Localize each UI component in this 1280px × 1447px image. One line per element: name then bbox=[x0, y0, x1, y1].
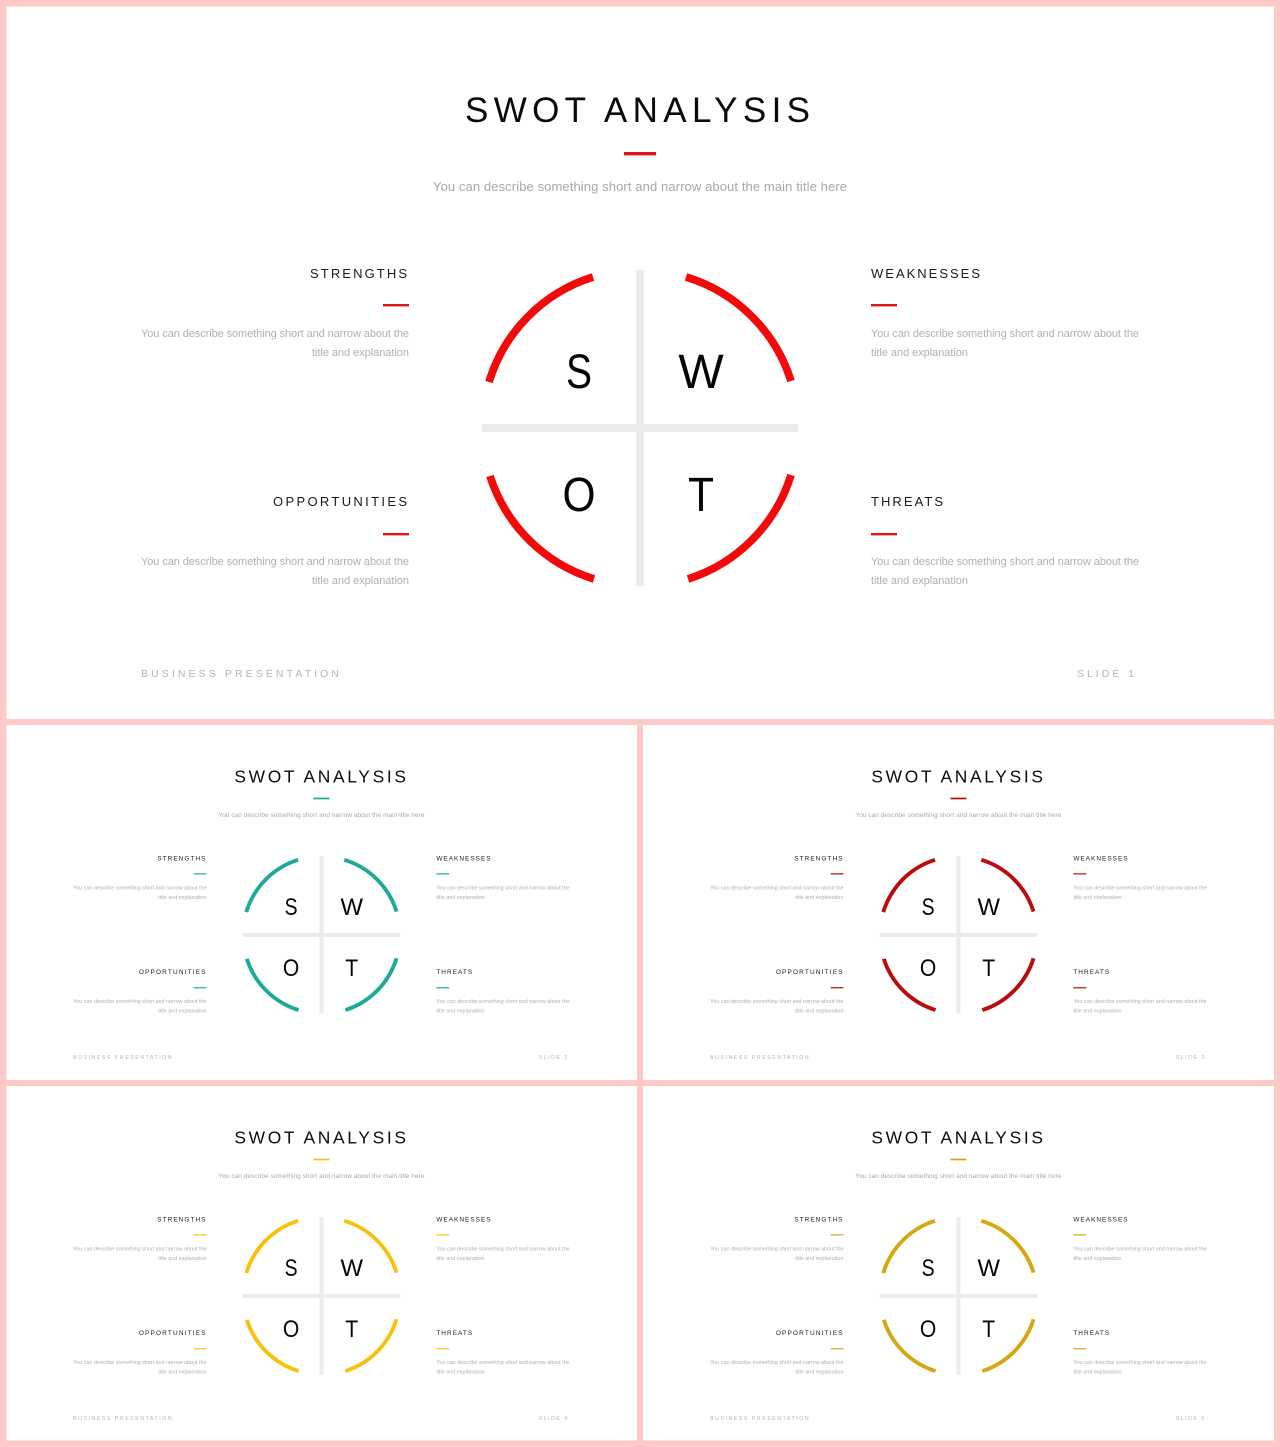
text block: threats: THREATS bbox=[1073, 1330, 1110, 1337]
text block: threats bbox=[871, 494, 1139, 587]
subtitle: You can describe something short and narrow about the main title here bbox=[218, 1173, 425, 1180]
footer right: SLIDE 2 bbox=[539, 1055, 567, 1061]
text block: opportunities: OPPORTUNITIES bbox=[776, 1330, 843, 1337]
text block: strengths bbox=[710, 855, 843, 901]
text block: weaknesses: title and explanation bbox=[436, 1256, 485, 1262]
text block: strengths: You can describe something short and narrow about the bbox=[73, 1247, 206, 1253]
title: SWOT ANALYSIS bbox=[465, 91, 810, 130]
text block: threats: You can describe something short and narrow about the bbox=[436, 999, 570, 1005]
footer left: BUSINESS PRESENTATION bbox=[710, 1416, 809, 1422]
text block: opportunities: You can describe something short and narrow about the bbox=[73, 1360, 206, 1366]
title: SWOT ANALYSIS bbox=[871, 1128, 1043, 1148]
text block: opportunities: You can describe something short and narrow about the bbox=[710, 1360, 843, 1366]
SWOT circle diagram: W bbox=[340, 894, 363, 921]
footer right: SLIDE 1 bbox=[1077, 668, 1134, 680]
text block: strengths: You can describe something short and narrow about the bbox=[141, 328, 409, 340]
SWOT circle diagram: T bbox=[345, 955, 359, 982]
footer right: SLIDE 5 bbox=[1176, 1416, 1204, 1422]
text block: opportunities: title and explanation bbox=[312, 575, 409, 587]
footer right: SLIDE 3 bbox=[1176, 1055, 1204, 1061]
text block: threats: title and explanation bbox=[1073, 1370, 1122, 1376]
SWOT circle diagram bbox=[880, 856, 1037, 1014]
text block: threats: title and explanation bbox=[1073, 1009, 1122, 1015]
text block: weaknesses: WEAKNESSES bbox=[1073, 1216, 1128, 1223]
panel: slide 2 (teal) bbox=[6, 725, 637, 1080]
text block: threats bbox=[436, 1330, 570, 1376]
text block: strengths bbox=[710, 1216, 843, 1262]
SWOT circle diagram: S bbox=[922, 1255, 935, 1282]
footer right: SLIDE 4 bbox=[539, 1416, 567, 1422]
text block: weaknesses: You can describe something short and narrow about the bbox=[1073, 886, 1207, 892]
SWOT circle diagram: T bbox=[982, 955, 996, 982]
SWOT circle diagram bbox=[482, 270, 798, 586]
SWOT circle diagram bbox=[880, 1217, 1037, 1375]
SWOT circle diagram: T bbox=[982, 1316, 996, 1343]
SWOT circle diagram: W bbox=[977, 1255, 1000, 1282]
panel: slide 5 (gold) bbox=[643, 1086, 1274, 1440]
text block: opportunities: OPPORTUNITIES bbox=[776, 969, 843, 976]
text block: weaknesses: You can describe something short and narrow about the bbox=[436, 1247, 570, 1253]
text block: opportunities: OPPORTUNITIES bbox=[139, 1330, 206, 1337]
panel: slide 1 (red, large) bbox=[6, 6, 1274, 719]
text block: strengths bbox=[73, 855, 206, 901]
footer left: BUSINESS PRESENTATION bbox=[73, 1055, 172, 1061]
text block: threats bbox=[1073, 969, 1207, 1015]
text block: strengths: You can describe something short and narrow about the bbox=[710, 886, 843, 892]
text block: opportunities: OPPORTUNITIES bbox=[273, 494, 407, 509]
SWOT circle diagram bbox=[243, 856, 400, 1014]
title: SWOT ANALYSIS bbox=[234, 767, 406, 787]
text block: weaknesses: You can describe something short and narrow about the bbox=[1073, 1247, 1207, 1253]
text block: threats: THREATS bbox=[436, 969, 473, 976]
panel: slide 4 (yellow) bbox=[6, 1086, 637, 1440]
text block: strengths: title and explanation bbox=[158, 895, 206, 901]
text block: weaknesses: WEAKNESSES bbox=[436, 1216, 491, 1223]
SWOT circle diagram: W bbox=[678, 346, 724, 399]
text block: opportunities: You can describe something short and narrow about the bbox=[73, 999, 206, 1005]
text block: opportunities: OPPORTUNITIES bbox=[139, 969, 206, 976]
text block: threats: You can describe something short and narrow about the bbox=[871, 556, 1139, 568]
text block: weaknesses bbox=[871, 266, 1139, 359]
text block: threats: THREATS bbox=[1073, 969, 1110, 976]
SWOT circle diagram: O bbox=[283, 955, 299, 982]
title accent line bbox=[950, 1159, 966, 1160]
text block: strengths bbox=[141, 266, 409, 359]
title: SWOT ANALYSIS bbox=[234, 1128, 406, 1148]
text block: weaknesses: title and explanation bbox=[1073, 1256, 1122, 1262]
text block: opportunities: title and explanation bbox=[795, 1370, 843, 1376]
text block: weaknesses: WEAKNESSES bbox=[871, 266, 980, 281]
text block: strengths: STRENGTHS bbox=[157, 855, 206, 862]
footer left: BUSINESS PRESENTATION bbox=[141, 668, 339, 680]
text block: threats: title and explanation bbox=[871, 575, 968, 587]
text block: opportunities bbox=[141, 494, 409, 587]
text block: opportunities bbox=[73, 1330, 206, 1376]
text block: opportunities: title and explanation bbox=[158, 1370, 206, 1376]
text block: weaknesses bbox=[436, 1216, 570, 1262]
text block: strengths: STRENGTHS bbox=[794, 1216, 843, 1223]
text block: threats: title and explanation bbox=[436, 1370, 485, 1376]
text block: strengths: title and explanation bbox=[312, 347, 409, 359]
text block: strengths: STRENGTHS bbox=[794, 855, 843, 862]
subtitle: You can describe something short and narrow about the main title here bbox=[218, 812, 425, 819]
text block: weaknesses: You can describe something short and narrow about the bbox=[436, 886, 570, 892]
text block: weaknesses: WEAKNESSES bbox=[1073, 855, 1128, 862]
text block: strengths: title and explanation bbox=[795, 1256, 843, 1262]
SWOT circle diagram: S bbox=[285, 894, 298, 921]
title accent line bbox=[950, 798, 966, 799]
SWOT circle diagram: W bbox=[977, 894, 1000, 921]
SWOT circle diagram: S bbox=[566, 346, 592, 399]
text block: weaknesses: title and explanation bbox=[871, 347, 968, 359]
text block: weaknesses bbox=[1073, 1216, 1207, 1262]
text block: threats bbox=[1073, 1330, 1207, 1376]
text block: opportunities bbox=[710, 1330, 843, 1376]
SWOT circle diagram: O bbox=[920, 955, 936, 982]
text block: strengths: You can describe something short and narrow about the bbox=[73, 886, 206, 892]
subtitle: You can describe something short and narrow about the main title here bbox=[855, 812, 1062, 819]
footer left: BUSINESS PRESENTATION bbox=[710, 1055, 809, 1061]
text block: weaknesses: title and explanation bbox=[436, 895, 485, 901]
text block: weaknesses bbox=[1073, 855, 1207, 901]
text block: threats: title and explanation bbox=[436, 1009, 485, 1015]
subtitle: You can describe something short and narrow about the main title here bbox=[433, 179, 847, 194]
text block: strengths: STRENGTHS bbox=[310, 266, 407, 281]
text block: opportunities bbox=[73, 969, 206, 1015]
text block: opportunities: You can describe something short and narrow about the bbox=[141, 556, 409, 568]
text block: threats: THREATS bbox=[871, 494, 943, 509]
SWOT circle diagram: S bbox=[285, 1255, 298, 1282]
text block: strengths: You can describe something short and narrow about the bbox=[710, 1247, 843, 1253]
SWOT circle diagram: T bbox=[345, 1316, 359, 1343]
text block: weaknesses: title and explanation bbox=[1073, 895, 1122, 901]
SWOT circle diagram: S bbox=[922, 894, 935, 921]
text block: weaknesses: You can describe something short and narrow about the bbox=[871, 328, 1139, 340]
subtitle: You can describe something short and narrow about the main title here bbox=[855, 1173, 1062, 1180]
text block: weaknesses bbox=[436, 855, 570, 901]
text block: threats: You can describe something short and narrow about the bbox=[1073, 1360, 1207, 1366]
text block: threats bbox=[436, 969, 570, 1015]
SWOT circle diagram bbox=[243, 1217, 400, 1375]
SWOT circle diagram: T bbox=[688, 469, 714, 522]
title accent line bbox=[624, 152, 656, 155]
title accent line bbox=[313, 798, 329, 799]
title: SWOT ANALYSIS bbox=[871, 767, 1043, 787]
text block: weaknesses: WEAKNESSES bbox=[436, 855, 491, 862]
text block: strengths: title and explanation bbox=[158, 1256, 206, 1262]
text block: opportunities: You can describe something short and narrow about the bbox=[710, 999, 843, 1005]
text block: strengths: STRENGTHS bbox=[157, 1216, 206, 1223]
SWOT circle diagram: W bbox=[340, 1255, 363, 1282]
SWOT circle diagram: O bbox=[920, 1316, 936, 1343]
text block: threats: You can describe something short and narrow about the bbox=[1073, 999, 1207, 1005]
text block: threats: THREATS bbox=[436, 1330, 473, 1337]
title accent line bbox=[313, 1159, 329, 1160]
text block: threats: You can describe something short and narrow about the bbox=[436, 1360, 570, 1366]
text block: opportunities: title and explanation bbox=[158, 1009, 206, 1015]
SWOT circle diagram: O bbox=[562, 469, 596, 522]
text block: strengths: title and explanation bbox=[795, 895, 843, 901]
text block: strengths bbox=[73, 1216, 206, 1262]
SWOT circle diagram: O bbox=[283, 1316, 299, 1343]
panel: slide 3 (dark red) bbox=[643, 725, 1274, 1080]
text block: opportunities: title and explanation bbox=[795, 1009, 843, 1015]
text block: opportunities bbox=[710, 969, 843, 1015]
footer left: BUSINESS PRESENTATION bbox=[73, 1416, 172, 1422]
